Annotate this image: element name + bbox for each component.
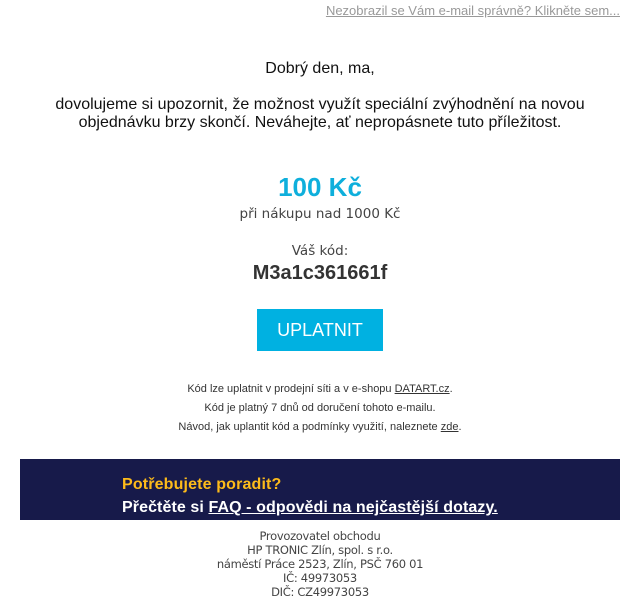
button: uplatnit: [257, 309, 383, 351]
intro text: dovolujeme si upozornit, že možnost využít speciální zvýhodnění na novou: [55, 96, 585, 113]
operator details: Provozovatel obchodu: [259, 529, 381, 543]
voucher code: M3a1c361661f: [253, 262, 387, 284]
terms text: Návod, jak uplantit kód a podmínky využití, naleznete zde.: [178, 421, 462, 433]
terms text: Kód lze uplatnit v prodejní síti a v e-shopu DATART.cz.: [187, 383, 453, 395]
operator details: DIČ: CZ49973053: [271, 585, 369, 599]
discount amount: 100 Kč: [278, 172, 362, 202]
intro text: [55, 96, 585, 131]
operator details: [217, 529, 423, 599]
discount condition: při nákupu nad 1000 Kč: [240, 206, 400, 222]
terms text: Kód je platný 7 dnů od doručení tohoto e-mailu.: [204, 402, 436, 414]
code label: Váš kód:: [292, 243, 348, 259]
panel: help banner: [20, 459, 620, 520]
help heading: Potřebujete poradit?: [122, 476, 281, 493]
terms text: [178, 383, 462, 433]
operator details: HP TRONIC Zlín, spol. s r.o.: [247, 543, 393, 557]
button: uplatnit: UPLATNIT: [277, 320, 363, 340]
FAQ line: Přečtěte si FAQ - odpovědi na nejčastější dotazy.: [122, 499, 498, 516]
operator details: náměstí Práce 2523, Zlín, PSČ 760 01: [217, 557, 423, 571]
intro text: objednávku brzy skončí. Neváhejte, ať nepropásnete tuto příležitost.: [79, 114, 561, 131]
operator details: IČ: 49973053: [283, 571, 357, 585]
greeting: Dobrý den, ma,: [265, 60, 375, 77]
preheader link: Nezobrazil se Vám e-mail správně? Klikněte sem...: [326, 3, 620, 18]
